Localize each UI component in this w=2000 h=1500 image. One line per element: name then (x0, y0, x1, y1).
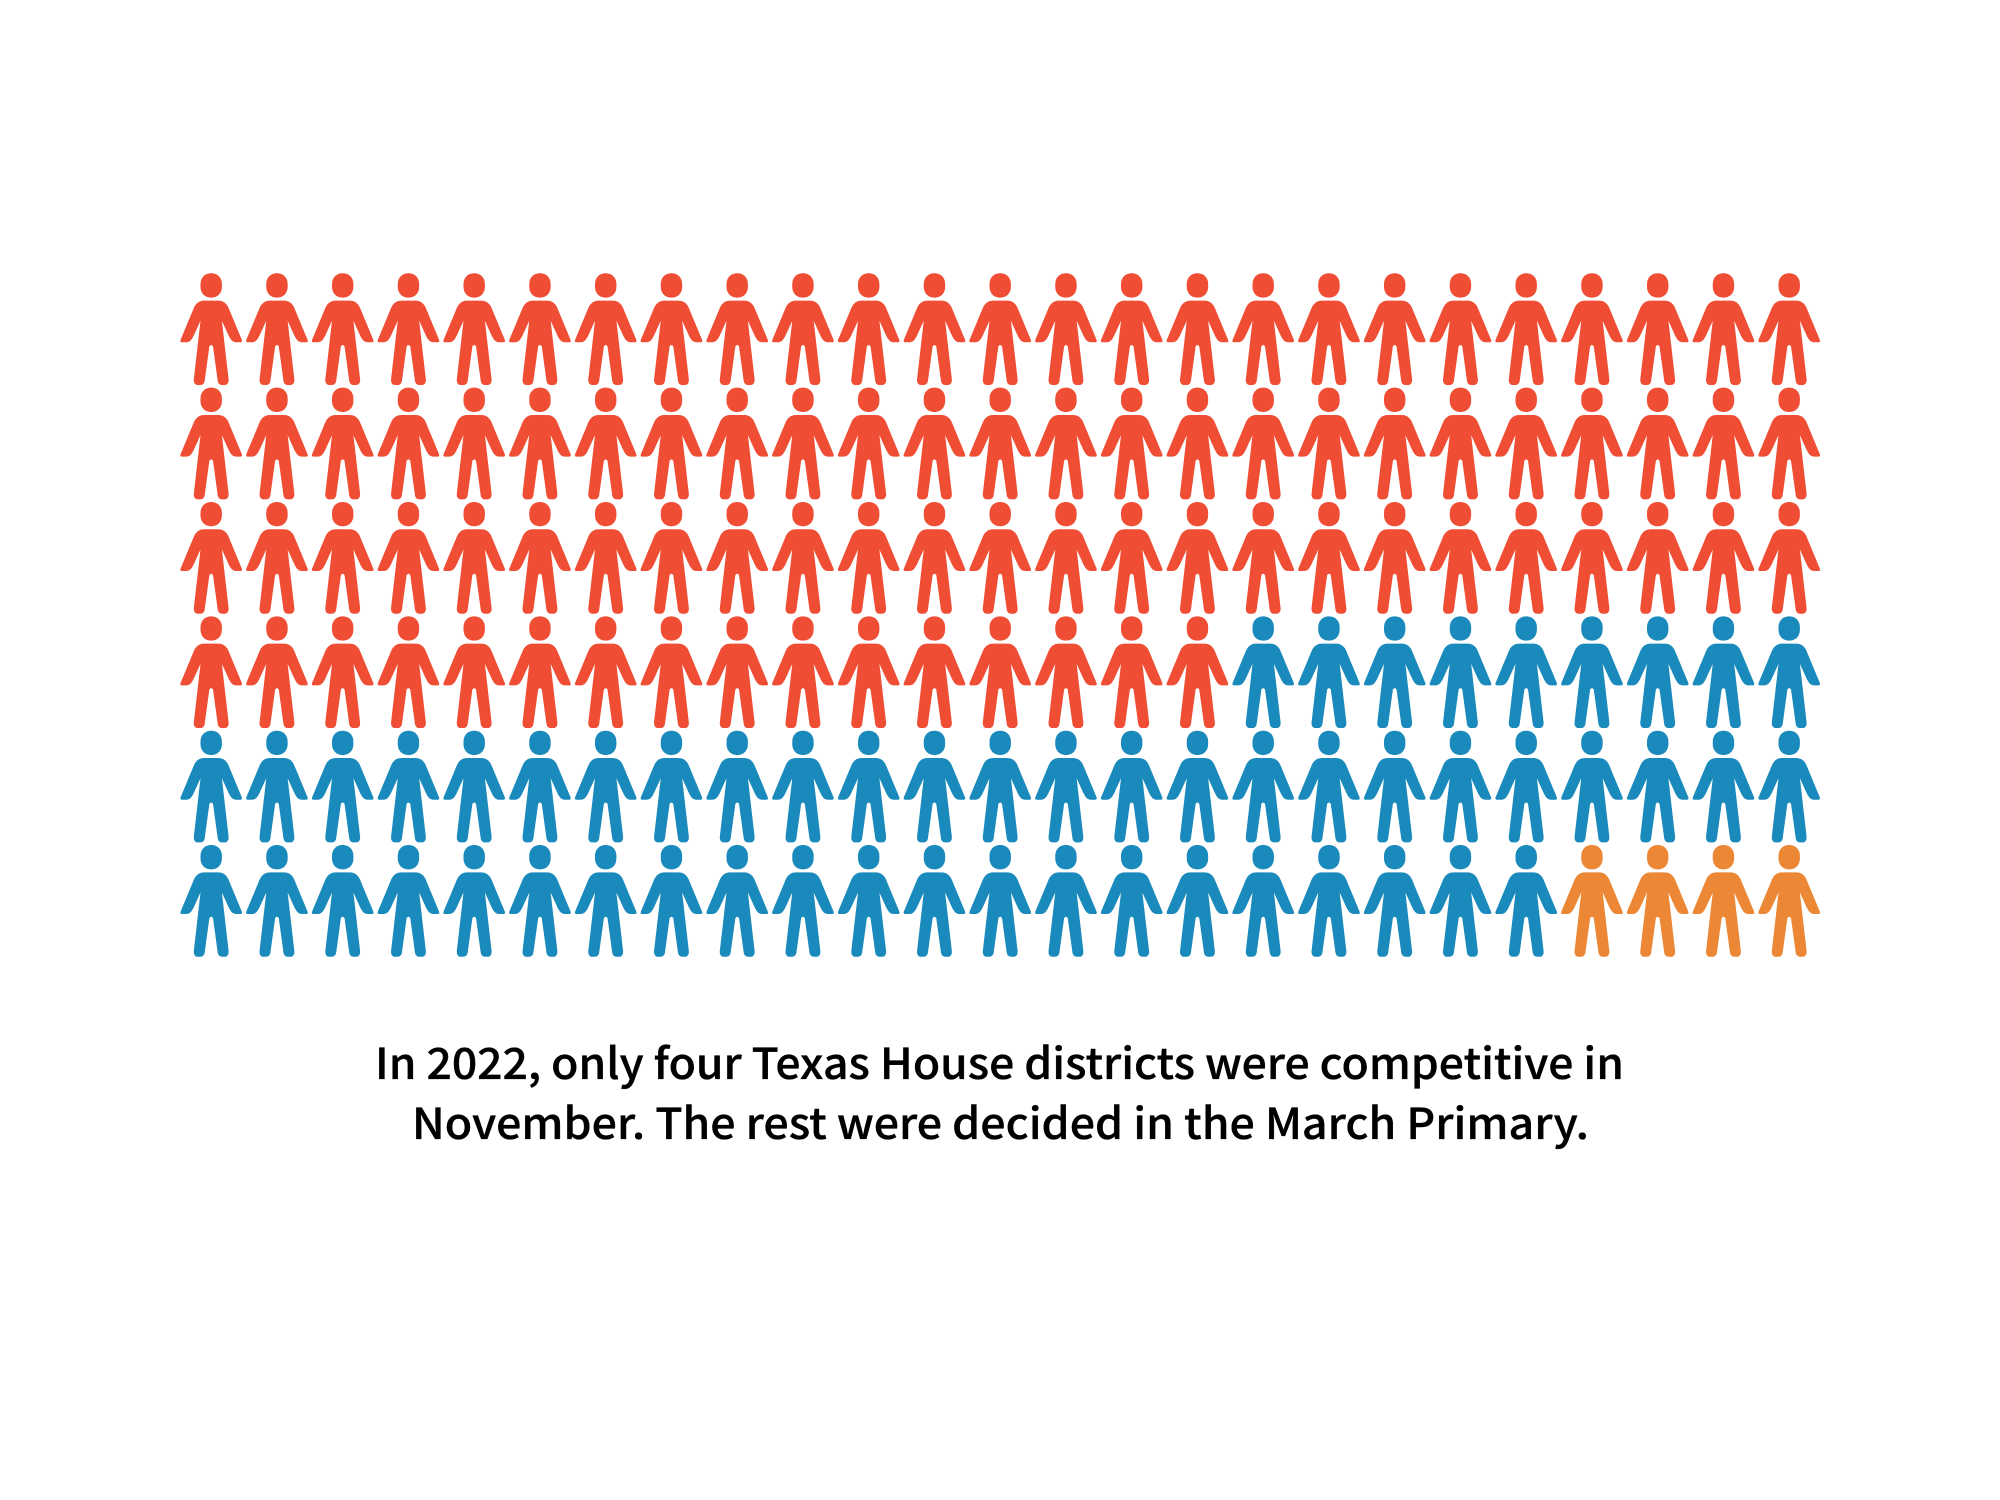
row 4: 16 red and 9 blue figures (180, 616, 1820, 728)
row 1: 25 red figures (180, 273, 1820, 385)
row 2: 25 red figures (180, 388, 1820, 499)
caption text: In 2022, only four Texas House districts were competitive in (375, 1030, 1624, 1092)
row 5: 25 blue figures (180, 731, 1820, 842)
row 3: 25 red figures (180, 502, 1820, 614)
caption text (375, 1030, 1624, 1152)
pictogram chart: 150 Texas House districts (180, 273, 1820, 957)
caption text: November. The rest were decided in the March Primary. (412, 1090, 1589, 1152)
row 6: 21 blue and 4 orange figures (180, 845, 1820, 957)
